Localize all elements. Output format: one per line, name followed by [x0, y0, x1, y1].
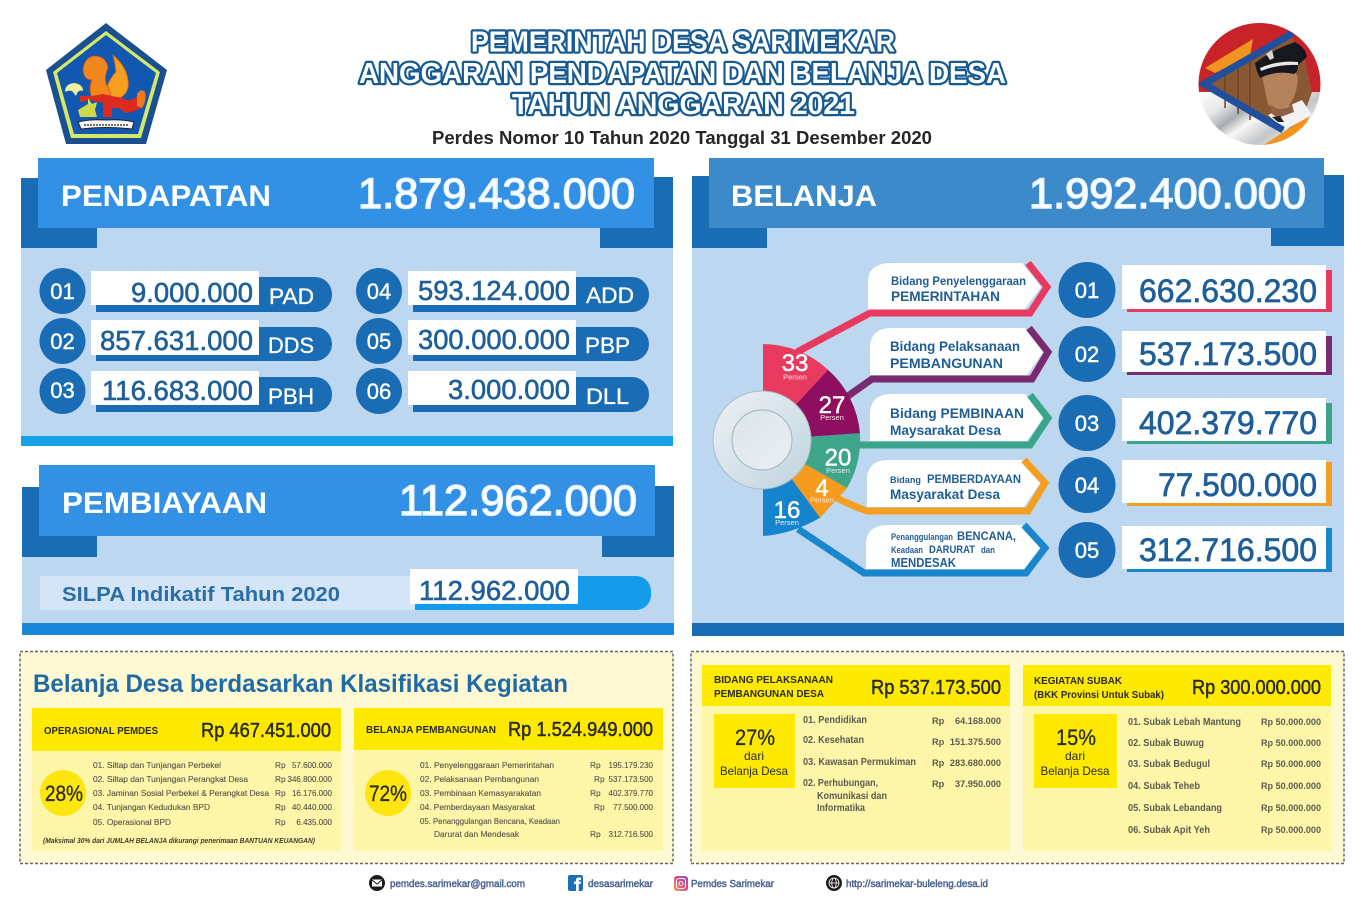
card: bidang pelaksanaan pembangunan desa: Informatika [817, 803, 865, 814]
header: belanja: BELANJA [731, 180, 877, 213]
card: bidang pelaksanaan pembangunan desa: dari [744, 749, 764, 763]
card: belanja pembangunan: Rp [590, 829, 601, 839]
card: operasional pemdes: Rp 467.451.000 [201, 720, 331, 742]
card: operasional pemdes: 346.800.000 [288, 775, 333, 784]
card: belanja pembangunan: BELANJA PEMBANGUNAN [366, 725, 496, 736]
row 04 ADD [356, 268, 649, 314]
card: bidang pelaksanaan pembangunan desa: Komunikasi dan [817, 791, 887, 802]
branch 04: pemberdayaan: PEMBERDAYAAN [927, 472, 1021, 486]
value 03 [1058, 395, 1332, 451]
card: operasional pemdes: Rp [275, 788, 286, 798]
email address: pemdes.sarimekar@gmail.com [390, 879, 525, 890]
card: kegiatan subak: 05. Subak Lebandang [1128, 803, 1222, 814]
row 02 DDS: 857.631.000 [100, 325, 253, 356]
card: bidang pelaksanaan pembangunan desa: 01. Pendidikan [803, 715, 867, 726]
card: operasional pemdes: (Maksimal 30% dari JUMLAH BELANJA dikurangi penerimaan BANTUAN KEUANGAN) [43, 836, 315, 845]
value 05: 312.716.500 [1139, 532, 1317, 568]
card: operasional pemdes: 16.176.000 [292, 789, 333, 798]
row 01 PAD: 9.000.000 [131, 277, 253, 308]
card: belanja pembangunan [354, 708, 663, 851]
card: belanja pembangunan: 312.716.500 [608, 830, 654, 839]
branch 02: pembangunan: Bidang Pelaksanaan [890, 338, 1020, 354]
row 03 PBH [40, 368, 332, 414]
card: operasional pemdes: 05. Operasional BPD [93, 817, 171, 827]
card: bidang pelaksanaan pembangunan desa: Rp [932, 737, 945, 747]
branch 05: bencana: Keadaan [891, 545, 923, 555]
header: pembiayaan [39, 465, 655, 536]
card: bidang pelaksanaan pembangunan desa: Rp [932, 716, 945, 726]
card: belanja pembangunan: Rp [594, 774, 605, 784]
row 05 PBP [356, 318, 649, 364]
row 03 PBH: PBH [268, 384, 314, 409]
card: bidang pelaksanaan pembangunan desa: BIDANG PELAKSANAAN [714, 675, 833, 686]
radial chart: share of spending by bidang: Persen [820, 413, 844, 422]
row 03 PBH: 03 [50, 378, 75, 403]
row 06 DLL: 3.000.000 [448, 374, 570, 405]
card: belanja pembangunan: 03. Pembinaan Kemasyarakatan [420, 788, 541, 798]
card: kegiatan subak: Rp 50.000.000 [1261, 738, 1321, 748]
branch 04: pemberdayaan: Masyarakat Desa [890, 486, 1000, 502]
row 01 PAD: PAD [269, 284, 314, 309]
row 05 PBP: 300.000.000 [418, 324, 570, 355]
radial chart: share of spending by bidang: Persen [775, 518, 799, 527]
card: kegiatan subak: 04. Subak Teheb [1128, 781, 1200, 792]
row 06 DLL [356, 368, 649, 414]
icon: globe [826, 875, 842, 891]
header: belanja [709, 158, 1324, 228]
panel: klasifikasi kegiatan [20, 652, 673, 864]
card: operasional pemdes [32, 708, 341, 851]
panel: belanja [692, 158, 1344, 636]
radial chart: share of spending by bidang: Persen [826, 466, 850, 475]
radial chart: share of spending by bidang: Persen [783, 372, 807, 382]
card: belanja pembangunan: 195.179.230 [608, 761, 654, 770]
card: belanja pembangunan: 402.379.770 [608, 789, 654, 798]
value 04: 77.500.000 [1158, 467, 1317, 503]
panel: pendapatan [21, 158, 673, 446]
row 01 PAD [40, 268, 332, 314]
icon: instagram [674, 876, 688, 891]
card: kegiatan subak [1023, 665, 1331, 851]
value 01 [1058, 262, 1332, 318]
card: belanja pembangunan: 02. Pelaksanaan Pembangunan [420, 774, 539, 784]
card: bidang pelaksanaan pembangunan desa: 151.375.500 [950, 737, 1001, 747]
card: operasional pemdes: Rp [275, 760, 286, 770]
header: pendapatan [38, 158, 654, 228]
card: bidang pelaksanaan pembangunan desa: Belanja Desa [720, 764, 788, 778]
card: belanja pembangunan: 01. Penyelenggaraan Pemerintahan [420, 760, 554, 770]
branch 03: pembinaan [850, 394, 1048, 445]
panel: rincian bidang [691, 652, 1344, 864]
instagram name: Pemdes Sarimekar [691, 879, 775, 890]
card: belanja pembangunan: Rp 1.524.949.000 [508, 719, 653, 741]
card: operasional pemdes: OPERASIONAL PEMDES [44, 726, 158, 737]
card: operasional pemdes: Rp [275, 817, 286, 827]
card: kegiatan subak: 06. Subak Apit Yeh [1128, 825, 1210, 836]
card: kegiatan subak: 15% [1056, 725, 1096, 750]
branch 02: pembangunan: PEMBANGUNAN [890, 355, 1003, 371]
card: operasional pemdes: Rp [275, 774, 286, 784]
card: belanja pembangunan: 537.173.500 [608, 775, 654, 784]
value 05 [1058, 522, 1332, 578]
card: bidang pelaksanaan pembangunan desa: 02. Kesehatan [803, 735, 864, 746]
panel: pembiayaan [22, 465, 674, 635]
branch 05: bencana: MENDESAK [891, 555, 957, 570]
branch 01: pemerintahan: PEMERINTAHAN [891, 288, 1000, 304]
branch 03: pembinaan: Bidang PEMBINAAN [890, 405, 1024, 421]
radial chart: share of spending by bidang: 33 [782, 350, 808, 377]
value 01: 01 [1075, 278, 1099, 303]
header: pendapatan: 1.879.438.000 [358, 170, 635, 218]
row 02 DDS: 02 [50, 329, 75, 354]
title: ANGGARAN PENDAPATAN DAN BELANJA DESA [359, 58, 1006, 90]
card: kegiatan subak: Belanja Desa [1040, 764, 1110, 778]
card: kegiatan subak: (BKK Provinsi Untuk Subak) [1034, 690, 1164, 701]
card: operasional pemdes: 28% [45, 781, 83, 806]
card: kegiatan subak: Rp 50.000.000 [1261, 781, 1321, 791]
facebook name: desasarimekar [588, 879, 654, 890]
branch 04: pemberdayaan [835, 460, 1045, 511]
card: belanja pembangunan: 72% [369, 781, 407, 806]
title: PEMERINTAH DESA SARIMEKAR [471, 26, 895, 58]
row 05 PBP: PBP [585, 333, 630, 358]
card: bidang pelaksanaan pembangunan desa: PEMBANGUNAN DESA [714, 689, 824, 700]
radial chart: share of spending by bidang: 27 [819, 392, 845, 419]
branch 05: bencana: DARURAT [929, 544, 975, 556]
card: kegiatan subak: Rp 50.000.000 [1261, 825, 1321, 835]
card: operasional pemdes: 6.435.000 [296, 818, 333, 827]
card: kegiatan subak: KEGIATAN SUBAK [1034, 676, 1123, 687]
subtitle: Perdes Nomor 10 Tahun 2020 Tanggal 31 Desember 2020 [432, 128, 932, 148]
row 03 PBH: 116.683.000 [102, 375, 253, 406]
value 02: 02 [1075, 342, 1099, 367]
card: kegiatan subak: Rp 300.000.000 [1192, 677, 1321, 699]
value 02: 537.173.500 [1139, 336, 1317, 372]
row 06 DLL: 06 [367, 379, 391, 404]
branch 05: bencana: BENCANA, [957, 529, 1016, 543]
card: operasional pemdes: 03. Jaminan Sosial Perbekel & Perangkat Desa [93, 788, 269, 798]
card: bidang pelaksanaan pembangunan desa: Rp 537.173.500 [871, 677, 1001, 699]
row 06 DLL: DLL [586, 384, 629, 409]
branch 04: pemberdayaan: Bidang [890, 475, 921, 485]
card: bidang pelaksanaan pembangunan desa: Rp [932, 779, 945, 789]
branch 01: pemerintahan [797, 263, 1047, 352]
card: belanja pembangunan: 04. Pemberdayaan Masyarakat [420, 802, 536, 812]
row 02 DDS: DDS [268, 333, 314, 358]
card: kegiatan subak: 02. Subak Buwug [1128, 738, 1204, 749]
card: operasional pemdes: 40.440.000 [292, 803, 333, 812]
header: pembiayaan: PEMBIAYAAN [62, 487, 267, 520]
card: belanja pembangunan: Darurat dan Mendesak [434, 829, 520, 839]
website: http://sarimekar-buleleng.desa.id [846, 879, 988, 890]
card: bidang pelaksanaan pembangunan desa: 02. Perhubungan, [803, 778, 878, 789]
value 04: 04 [1075, 473, 1099, 498]
radial chart: share of spending by bidang: 16 [774, 497, 800, 524]
value 04 [1058, 457, 1332, 513]
radial chart: share of spending by bidang: 4 [815, 475, 829, 502]
row 04 ADD: ADD [586, 283, 634, 308]
card: kegiatan subak: Rp 50.000.000 [1261, 759, 1321, 769]
branch 01: pemerintahan: Bidang Penyelenggaraan [891, 274, 1026, 288]
card: bidang pelaksanaan pembangunan desa: 283.680.000 [950, 758, 1001, 768]
branch 05: bencana [798, 525, 1045, 573]
portrait: village head on flag backdrop [1198, 22, 1322, 146]
header: pendapatan: PENDAPATAN [61, 180, 271, 213]
header: pembiayaan: 112.962.000 [399, 477, 637, 525]
card: operasional pemdes: 04. Tunjangan Kedudukan BPD [93, 802, 210, 812]
title [359, 26, 1006, 121]
card: belanja pembangunan: Rp [590, 760, 601, 770]
card: belanja pembangunan: Rp [594, 802, 605, 812]
row 02 DDS [40, 318, 332, 364]
icon: facebook [568, 875, 583, 891]
card: kegiatan subak: Rp 50.000.000 [1261, 803, 1321, 813]
row 04 ADD: 593.124.000 [418, 275, 570, 306]
card: bidang pelaksanaan pembangunan desa [702, 665, 1010, 851]
card: kegiatan subak: 01. Subak Lebah Mantung [1128, 717, 1241, 728]
title: TAHUN ANGGARAN 2021 [512, 89, 855, 121]
card: bidang pelaksanaan pembangunan desa: 37.950.000 [955, 779, 1001, 789]
row 01 PAD: 01 [50, 279, 75, 304]
row: SILPA: 112.962.000 [419, 575, 570, 606]
branch 03: pembinaan: Maysarakat Desa [890, 422, 1001, 438]
header: belanja: 1.992.400.000 [1029, 170, 1306, 218]
row 05 PBP: 05 [367, 329, 391, 354]
card: bidang pelaksanaan pembangunan desa: Rp [932, 758, 945, 768]
branch 05: bencana: dan [981, 545, 995, 555]
value 03: 03 [1075, 411, 1099, 436]
card: belanja pembangunan: 77.500.000 [613, 803, 654, 812]
branch 05: bencana: Penanggulangan [891, 532, 953, 542]
value 03: 402.379.770 [1139, 405, 1317, 441]
value 05: 05 [1075, 538, 1099, 563]
footer: contact links [369, 875, 988, 891]
branch 02: pembangunan [848, 328, 1048, 396]
logo: village crest pentagon [46, 23, 167, 144]
row 04 ADD: 04 [367, 279, 391, 304]
row: SILPA [40, 569, 651, 610]
value 01: 662.630.230 [1139, 273, 1317, 309]
card: operasional pemdes: 02. Siltap dan Tunjangan Perangkat Desa [93, 774, 248, 784]
value 02 [1058, 326, 1332, 382]
card: kegiatan subak: 03. Subak Bedugul [1128, 759, 1210, 770]
card: belanja pembangunan: 05. Penanggulangan Bencana, Keadaan [420, 816, 560, 826]
card: operasional pemdes: 01. Siltap dan Tunjangan Perbekel [93, 760, 221, 770]
card: operasional pemdes: 57.600.000 [292, 761, 333, 770]
radial chart: share of spending by bidang: 20 [825, 444, 851, 472]
radial chart: share of spending by bidang: Persen [810, 496, 834, 504]
icon: email [369, 875, 385, 891]
heading: klasifikasi: Belanja Desa berdasarkan Klasifikasi Kegiatan [33, 670, 568, 698]
card: operasional pemdes: Rp [275, 802, 286, 812]
card: bidang pelaksanaan pembangunan desa: 03. Kawasan Permukiman [803, 757, 916, 768]
card: bidang pelaksanaan pembangunan desa: 64.168.000 [955, 716, 1001, 726]
radial chart: share of spending by bidang [713, 344, 860, 536]
card: kegiatan subak: dari [1065, 749, 1085, 763]
card: kegiatan subak: Rp 50.000.000 [1261, 717, 1321, 727]
card: bidang pelaksanaan pembangunan desa: 27% [735, 725, 775, 750]
row: SILPA: SILPA Indikatif Tahun 2020 [62, 584, 340, 606]
card: belanja pembangunan: Rp [590, 788, 601, 798]
